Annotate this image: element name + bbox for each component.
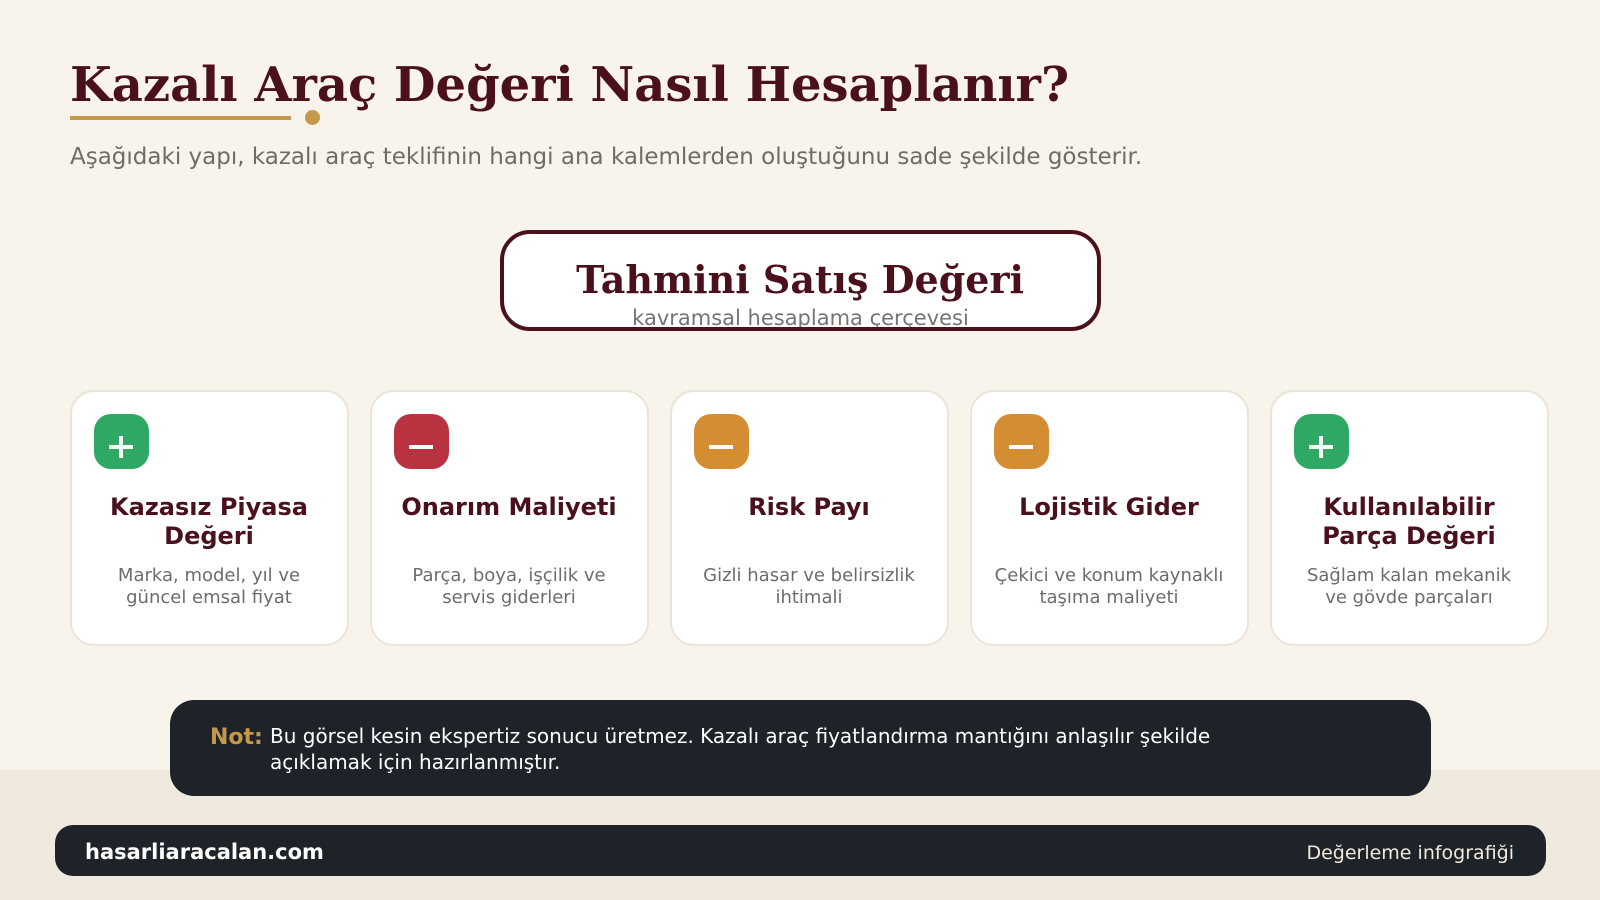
note label: Not:	[210, 725, 263, 750]
card heading: Değeri	[164, 522, 254, 550]
note bar	[170, 700, 1431, 796]
card description	[703, 565, 915, 608]
note text: Bu görsel kesin ekspertiz sonucu üretmez. Kazalı araç fiyatlandırma mantığını anlaşılır şekilde	[270, 724, 1210, 748]
card description: Çekici ve konum kaynaklı	[995, 565, 1223, 586]
card description	[412, 565, 606, 608]
card description: güncel emsal fiyat	[126, 587, 292, 608]
card description: ve gövde parçaları	[1325, 587, 1493, 608]
icon: minus	[694, 414, 749, 469]
card: risk share	[670, 390, 949, 646]
card: logistics cost	[970, 390, 1249, 646]
card description	[995, 565, 1223, 608]
hero heading: Tahmini Satış Değeri	[576, 257, 1024, 302]
card: repair cost	[370, 390, 649, 646]
icon: plus	[94, 414, 149, 469]
card heading: Kazasız Piyasa	[110, 493, 308, 521]
underline dot	[305, 110, 320, 125]
card description: Sağlam kalan mekanik	[1307, 565, 1511, 586]
card heading: Lojistik Gider	[1019, 493, 1199, 521]
card heading	[110, 493, 308, 550]
card: market value	[70, 390, 349, 646]
footer band background	[0, 770, 1600, 900]
card description: Parça, boya, işçilik ve	[412, 565, 606, 586]
panel: estimated sale value	[500, 230, 1101, 331]
card description	[118, 565, 300, 608]
card description: servis giderleri	[442, 587, 576, 608]
note text: açıklamak için hazırlanmıştır.	[270, 750, 560, 774]
footer bar	[55, 825, 1546, 876]
card: usable parts value	[1270, 390, 1549, 646]
card description: Marka, model, yıl ve	[118, 565, 300, 586]
card description: taşıma maliyeti	[1039, 587, 1179, 608]
card heading: Risk Payı	[748, 493, 870, 521]
footer label: Değerleme infografiği	[1306, 842, 1514, 864]
icon: plus	[1294, 414, 1349, 469]
title: Kazalı Araç Değeri Nasıl Hesaplanır?	[70, 57, 1069, 113]
icon: minus	[394, 414, 449, 469]
subtitle: Aşağıdaki yapı, kazalı araç teklifinin hangi ana kalemlerden oluştuğunu sade şekilde gösterir.	[70, 144, 1142, 170]
card description: Gizli hasar ve belirsizlik	[703, 565, 915, 586]
title underline	[70, 116, 291, 120]
card heading: Parça Değeri	[1322, 522, 1496, 550]
card description	[1307, 565, 1511, 608]
card heading: Onarım Maliyeti	[401, 493, 617, 521]
card heading	[1322, 493, 1496, 550]
hero subheading: kavramsal hesaplama çerçevesi	[632, 306, 969, 330]
site name: hasarliaracalan.com	[85, 840, 324, 864]
card heading: Kullanılabilir	[1323, 493, 1495, 521]
card description: ihtimali	[775, 587, 843, 608]
note text	[270, 724, 1210, 774]
icon: minus	[994, 414, 1049, 469]
